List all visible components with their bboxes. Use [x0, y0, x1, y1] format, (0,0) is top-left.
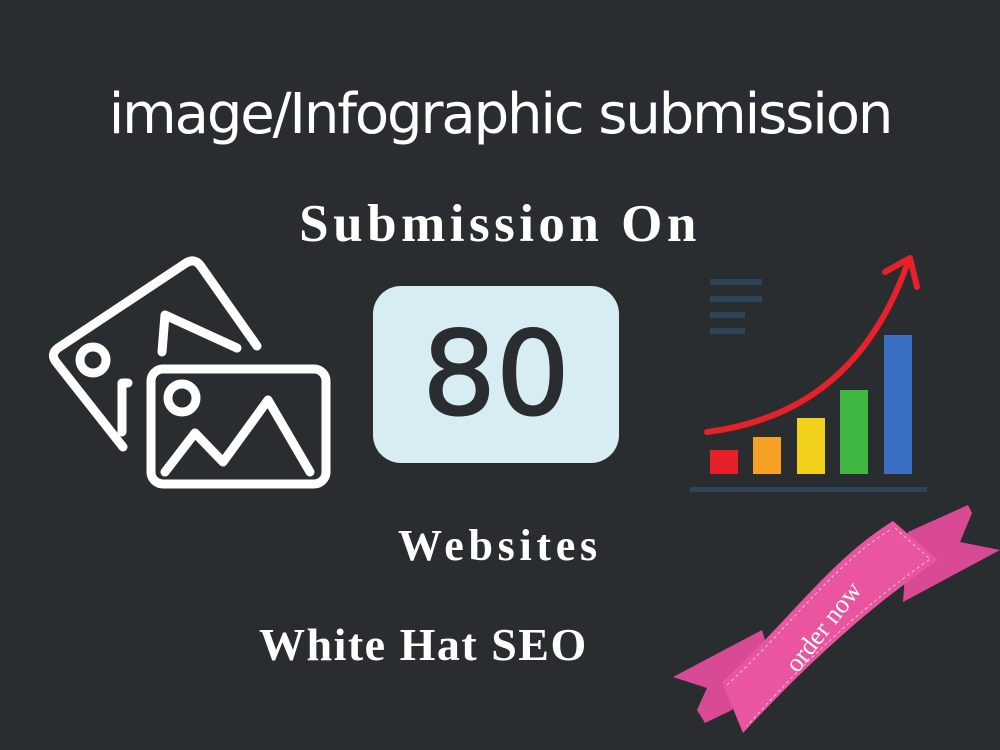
- number box 80: 80: [422, 307, 570, 442]
- ribbon: order now: order now: [779, 576, 868, 678]
- title: image/Infographic submission: [109, 82, 891, 147]
- text: Websites: Websites: [398, 521, 602, 570]
- ribbon: order now: [673, 505, 1000, 733]
- chart: growth bars: [690, 258, 927, 492]
- text: White Hat SEO: White Hat SEO: [259, 619, 588, 670]
- icon: images: [53, 261, 326, 484]
- arrow: red growth: [707, 258, 917, 432]
- subtitle: Submission On: Submission On: [299, 195, 701, 253]
- number box 80: [373, 286, 619, 463]
